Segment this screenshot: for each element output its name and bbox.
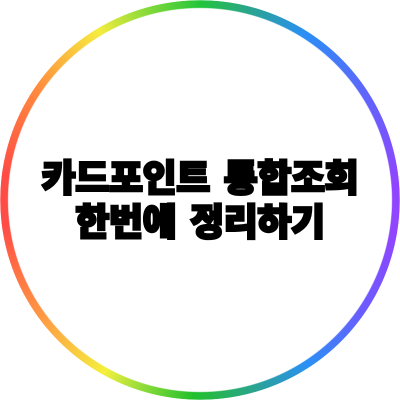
title [40, 158, 358, 243]
title: 한번에 정리하기 [75, 202, 325, 243]
title: 카드포인트 통합조회 [42, 158, 358, 199]
